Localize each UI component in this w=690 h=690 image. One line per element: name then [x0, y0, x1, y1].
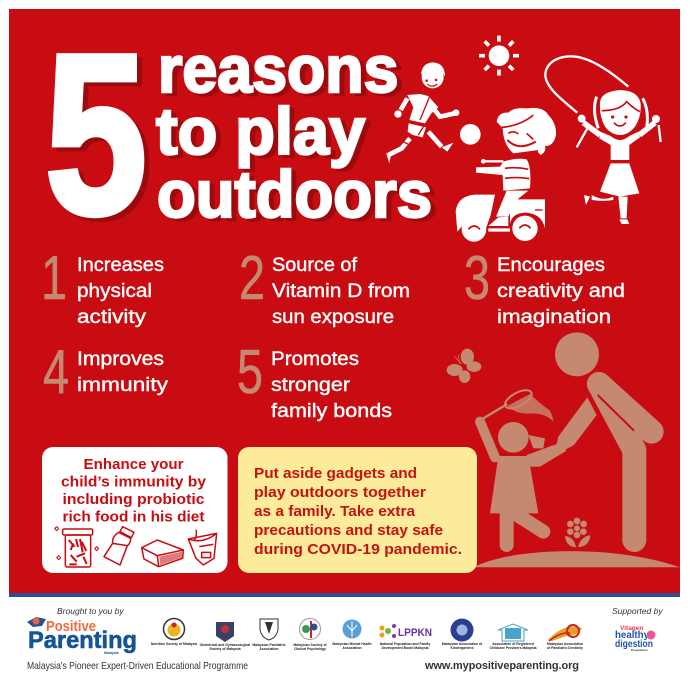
panel: probiotic tip	[42, 447, 228, 573]
logo: Positive Parenting	[27, 617, 137, 655]
footer: website: www.mypositiveparenting.org	[424, 660, 579, 672]
logo: Malaysian Association of Kindergartens: Kindergartens	[450, 646, 474, 650]
logo: Malaysian Association of Paediatric Dentistry: Malaysian Association	[547, 642, 583, 646]
panel: family message: play outdoors together	[254, 484, 426, 501]
reason 3: Encourages	[497, 255, 605, 276]
icon: tempeh block	[142, 540, 183, 567]
panel: family message: precautions and stay safe	[254, 522, 443, 539]
logo: Malaysian Society of Clinical Psychology	[293, 618, 328, 651]
logo: Positive Parenting: Positive	[46, 618, 96, 635]
illustration: parent and child	[447, 332, 680, 567]
panel: family message: Put aside gadgets and	[254, 465, 417, 482]
reason 1: 1	[41, 244, 67, 313]
logo: PPBM association: Childcare Providers Malaysia	[489, 646, 537, 650]
logo: Vitagen Healthy Digestion: Vitagen	[620, 625, 643, 632]
panel: family message	[238, 447, 477, 573]
icons: probiotic foods	[55, 527, 217, 567]
logo: Malaysian Paediatric Association: Malaysian Paediatric	[252, 643, 286, 647]
illustration: children playing	[386, 36, 661, 242]
icon: sun	[479, 36, 519, 76]
tip text: including probiotic	[62, 491, 204, 508]
icon: jar	[55, 527, 99, 567]
reason 3	[464, 244, 625, 328]
logo: Malaysian Association of Paediatric Dentistry: of Paediatric Dentistry	[547, 646, 583, 650]
tip text: Enhance your	[84, 456, 184, 473]
logo: Malaysian Paediatric Association	[252, 619, 286, 651]
icon: flower	[565, 518, 590, 547]
reason 5: Promotes	[271, 349, 359, 370]
logo: Malaysian Mental Health Association	[332, 620, 372, 650]
tip text: rich food in his diet	[62, 508, 204, 526]
logo: Obstetrical and Gynaecological Society of Malaysia: Society of Malaysia	[209, 647, 241, 651]
ground mound	[473, 551, 680, 567]
icon: running boy	[386, 62, 459, 163]
logo: Vitagen Healthy Digestion	[615, 625, 656, 652]
title line: reasons: reasons	[158, 33, 398, 106]
footer: brought to you by: Brought to you by	[57, 606, 124, 616]
panel: family message: during COVID-19 pandemic.	[254, 541, 462, 558]
reason 4	[43, 338, 169, 407]
logo: Malaysian Association of Kindergartens: Malaysian Association of	[442, 642, 483, 646]
icon: butterfly	[447, 349, 481, 383]
footer: supported by: Supported by	[612, 606, 663, 616]
reason 2	[239, 244, 410, 328]
reason 1: Increases	[77, 255, 164, 276]
icon: boy on toy car	[456, 108, 556, 242]
icon: adult figure	[555, 332, 652, 540]
logo: Malaysian Mental Health Association: Malaysian Mental Health	[332, 642, 372, 646]
reason 1: activity	[77, 307, 147, 328]
reason 5: 5	[237, 338, 263, 407]
reason 5	[237, 338, 392, 422]
title line: reasons: reasons	[163, 36, 403, 109]
logo: Vitagen Healthy Digestion: digestion	[615, 639, 653, 650]
logo: Vitagen Healthy Digestion: Programme	[631, 648, 648, 652]
logo: Malaysian Society of Clinical Psychology: Malaysian Society of	[293, 643, 328, 647]
logo: LPPKN: LPPKN	[398, 627, 432, 639]
logo: Malaysian Association of Kindergartens	[442, 618, 483, 650]
logo: Nutrition Society of Malaysia	[151, 618, 197, 646]
big numeral 5: 5	[45, 8, 147, 262]
title: 5 reasons to play outdoors	[45, 8, 437, 266]
tip text	[61, 456, 207, 526]
logo: PPBM association: Association of Registered	[492, 642, 534, 646]
logo: Malaysian Paediatric Association: Association	[259, 647, 279, 651]
panel: family message: as a family. Take extra	[254, 503, 416, 520]
reason 3: creativity and	[497, 281, 625, 302]
icon: yogurt cup	[188, 530, 217, 565]
logo: LPPKN: Development Board Malaysia	[381, 646, 429, 650]
big numeral 5: 5	[50, 12, 152, 266]
title line: outdoors: outdoors	[157, 157, 432, 231]
title line: to play: to play	[156, 94, 366, 168]
logo: PPBM association	[489, 624, 537, 650]
reason 4: Improves	[77, 349, 164, 370]
logo: Nutrition Society of Malaysia: Nutrition Society of Malaysia	[151, 642, 197, 646]
reason 2: sun exposure	[272, 307, 394, 328]
logo: Positive Parenting: Malaysia	[104, 651, 119, 655]
reason 2: Vitamin D from	[272, 281, 410, 302]
reason 4: immunity	[77, 375, 169, 396]
reason 1: physical	[77, 281, 152, 302]
icon: yoghurt drink bottle	[104, 527, 134, 565]
logo: Malaysian Society of Clinical Psychology: Clinical Psychology	[294, 647, 326, 651]
logo: Vitagen Healthy Digestion: healthy	[615, 630, 649, 641]
logo: Obstetrical and Gynaecological Society of Malaysia: Obstetrical and Gynaecological	[200, 643, 250, 647]
reason 4: 4	[43, 338, 69, 407]
reason 1	[41, 244, 164, 328]
footer: tagline: Malaysia's Pioneer Expert-Driven Educational Programme	[27, 660, 248, 672]
reason 5: stronger	[271, 375, 351, 396]
logo: Obstetrical and Gynaecological Society of Malaysia	[200, 622, 250, 651]
title line: to play: to play	[161, 97, 371, 171]
icon: girl skipping rope	[545, 56, 661, 224]
tip text: child’s immunity by	[61, 474, 207, 490]
icon: child with butterfly net	[480, 387, 567, 545]
reason 3: imagination	[497, 307, 611, 328]
logo: Positive Parenting: Parenting	[28, 627, 137, 654]
logo: Malaysian Mental Health Association: Association	[342, 646, 362, 650]
logo: LPPKN: National Population and Family	[380, 642, 430, 646]
title line: outdoors: outdoors	[162, 160, 437, 234]
logo: LPPKN	[380, 624, 432, 650]
reason 5: family bonds	[271, 401, 392, 422]
logo: Malaysian Association of Paediatric Dentistry	[547, 625, 583, 650]
reason 2: 2	[239, 244, 265, 313]
reason 2: Source of	[272, 255, 358, 276]
reason 3: 3	[464, 244, 490, 313]
icon: ball	[460, 124, 481, 145]
